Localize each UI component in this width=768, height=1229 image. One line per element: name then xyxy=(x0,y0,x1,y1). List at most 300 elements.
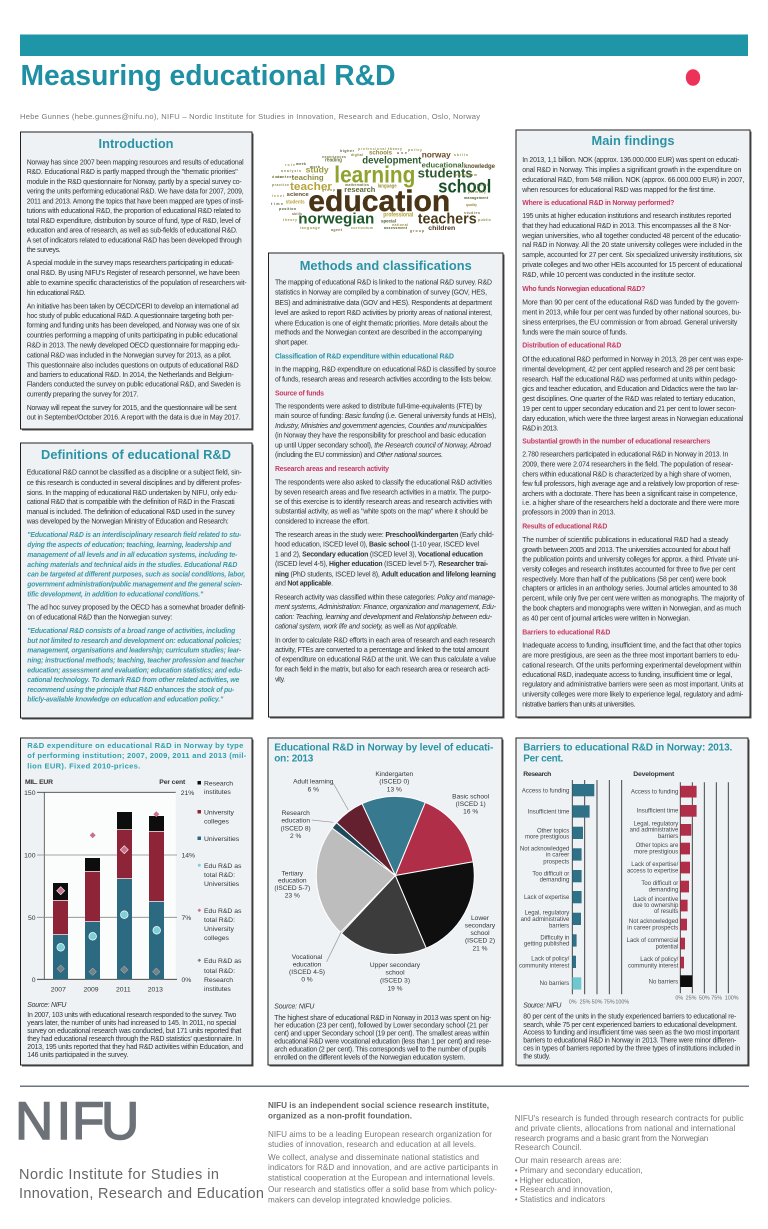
axis labels: 7% xyxy=(182,915,191,922)
word cloud image: teacher xyxy=(290,181,333,193)
text block: chart note xyxy=(27,1012,243,1059)
word cloud image: level xyxy=(272,194,284,198)
text block: introduction: This questionnaire also includes questions on outputs of educational R&D xyxy=(27,362,239,369)
pie labels: school xyxy=(470,930,490,937)
text block: research areas: vity. xyxy=(275,676,285,683)
pie labels: (ISCED 3) xyxy=(380,978,410,985)
text block: chart note: arch education (2 per cent). This corresponds well to the number of pupils xyxy=(274,1047,487,1054)
bar chart: development: Insufficient time xyxy=(637,808,679,814)
pie labels: Vocational xyxy=(292,954,323,961)
text block: research areas: of expenditure on educational R&D at the unit. We can thus calculate a value xyxy=(275,657,496,664)
text block: research areas: se of this exercise is to identify research areas and research activities with xyxy=(275,499,492,506)
bar chart: development: 25% xyxy=(686,995,697,1001)
text block: where performed xyxy=(521,213,743,279)
header band xyxy=(20,34,748,56)
text block: chart note: enrolled on the different levels of the Norwegian education system. xyxy=(274,1054,465,1061)
text block: distribution: gest disciplines. One quarter of the R&D was related to tertiary education, xyxy=(522,396,735,403)
bars: 2009 xyxy=(85,858,100,979)
word cloud image: week xyxy=(295,162,306,166)
text block: distribution: research. Half the educational R&D was performed at units within pedago- xyxy=(522,376,737,383)
text block: results: chapters or articles in an anthology series. Journal articles amounted to 38 xyxy=(522,586,737,593)
text block: growth in researchers xyxy=(522,452,739,517)
text block: source of funds xyxy=(275,403,496,459)
bar chart: development: 75% xyxy=(711,995,722,1001)
text block: who funds: funds were the main source of funds. xyxy=(522,329,627,336)
footer text: about NIFU: We collect, analyse and disseminate national statistics and xyxy=(268,1153,479,1162)
pie labels: (ISCED 0) xyxy=(379,778,409,785)
pie labels: Lower xyxy=(471,915,490,922)
word cloud image: curriculum xyxy=(351,226,373,230)
text block: OECD survey xyxy=(27,604,245,621)
text block: overview: when resources for educational R&D was mapped for the first time. xyxy=(521,187,715,194)
quote: Norwegian definition: aching materials and technical aids in the studies. Educational R&D xyxy=(27,562,237,569)
axis labels: 2013 xyxy=(148,987,163,994)
text block: results: growth between 2005 and 2013. The universities accounted for about half xyxy=(522,547,730,554)
pie labels: Research xyxy=(282,810,310,817)
legend: University xyxy=(204,809,234,816)
quote: Norwegian definition: "Educational R&D is an interdisciplinary research field related to stu- xyxy=(27,532,242,539)
footer text: about NIFU: makers can develop integrated knowledge policies. xyxy=(268,1196,452,1204)
title: Measuring educational R&D xyxy=(20,60,396,92)
text block: source of funds: Industry, Ministries and government agencies, Counties and municipalities xyxy=(275,423,488,430)
legend: institutes xyxy=(204,986,231,993)
text block: introduction: Norway has since 2007 been mapping resources and results of educational xyxy=(27,159,244,166)
text block: distribution: Of the educational R&D performed in Norway in 2013, 28 per cent was expe- xyxy=(522,357,743,364)
legend xyxy=(198,780,242,993)
text block: OECD survey: The ad hoc survey proposed by the OECD has a somewhat broader definiti- xyxy=(27,604,245,611)
word cloud image: management xyxy=(464,196,489,200)
word cloud image: studies xyxy=(464,211,480,215)
source: Source: NIFU xyxy=(523,1003,562,1010)
chart title: on: 2013 xyxy=(274,754,314,765)
footer text: about NIFU xyxy=(268,1101,498,1204)
bar chart: research: getting published xyxy=(524,941,569,947)
legend: colleges xyxy=(204,819,230,826)
quote: Norwegian definition: tific development, in addition to educational conditions." xyxy=(27,592,204,599)
text block: introduction: Norway will repeat the survey for 2015, and the questionnaire will be sent xyxy=(27,405,237,412)
bars: 2011 xyxy=(117,812,132,979)
pie labels: school xyxy=(385,970,405,977)
word cloud image: language xyxy=(300,226,320,230)
bar chart: research: Research xyxy=(523,771,551,778)
slice: kindergarten xyxy=(362,796,425,876)
text block: source of funds: main source of funding: Basic funding (i.e. General university funds at HEIs), xyxy=(275,413,496,420)
text block: results: the publication points and university colleges for approx. a third. Private uni- xyxy=(522,557,739,564)
markers: universities share xyxy=(57,911,160,951)
text block: source of funds: The respondents were asked to distribute full-time-equivalents (FTE) by xyxy=(275,403,483,410)
word cloud image: professional xyxy=(358,147,386,151)
bar chart: development: demanding xyxy=(649,887,678,893)
pie labels xyxy=(274,771,496,992)
source: Source: NIFU xyxy=(27,1002,67,1009)
legend: University xyxy=(204,926,234,933)
text block: introduction: R&D. Educational R&D is partly mapped through the "thematic priorities" xyxy=(27,169,238,176)
pie labels: education xyxy=(281,818,310,825)
bar chart: research: 75% xyxy=(604,999,615,1005)
pie labels: education xyxy=(278,878,307,885)
pie labels: (ISCED 4-5) xyxy=(289,969,325,976)
bar chart: research: Not acknowledged xyxy=(520,847,569,853)
text block: who funds: More than 90 per cent of the educational R&D was funded by the govern- xyxy=(522,300,739,307)
chart title: of performing institution; 2007, 2009, 2011 and 2013 (mil- xyxy=(27,751,247,760)
panel: main findings xyxy=(516,130,752,718)
text block: where performed: sample, accounted for 27 per cent. Six specialized university institutions, six xyxy=(522,252,743,259)
word cloud image: practice xyxy=(272,183,289,187)
word cloud image: mathematics xyxy=(345,183,369,187)
bar chart: development: 50% xyxy=(699,995,710,1001)
word cloud image: policy xyxy=(408,148,422,152)
text block: results: versity colleges and research institutes accounted for three to five per cent xyxy=(522,566,735,573)
axis labels: 2011 xyxy=(116,987,131,994)
footer text: about NIFU: studies of innovation, research and education at all levels. xyxy=(268,1140,476,1149)
word cloud image: students xyxy=(418,167,473,181)
subheading: growth in researchers: Substantial growth in the number of educational researchers xyxy=(522,438,710,445)
word cloud image: experiences xyxy=(322,155,346,159)
text block: definition intro: Educational R&D cannot be classified as a discipline or a subject field, sin- xyxy=(27,470,242,477)
word cloud image: work xyxy=(309,165,320,169)
text block: introduction: onal R&D. By using NIFU's Register of research personnel, we have been xyxy=(27,270,240,277)
text block: chart note: The highest share of educational R&D in Norway in 2013 was spent on hig- xyxy=(274,1015,491,1022)
text block: research areas: cation: Teaching, learning and development and Relationship between edu- xyxy=(275,614,493,621)
bar chart: research: Insufficient time xyxy=(528,809,570,815)
legend: Edu R&D as xyxy=(204,958,242,965)
text block: classification: In the mapping, R&D expenditure on educational R&D is classified by source xyxy=(275,367,496,374)
leader lines xyxy=(312,783,348,962)
text block: barriers: nistrative barriers than units at universities. xyxy=(522,701,635,708)
legend: Research xyxy=(204,780,233,787)
word cloud image: classroom xyxy=(455,173,477,177)
bar chart: development: in career prospects xyxy=(627,925,678,931)
NIFU logo: NIFU xyxy=(15,1092,139,1151)
icon: red dot xyxy=(686,69,700,86)
quote: OECD definition: education; assessment and evaluation; education statistics; and edu- xyxy=(27,667,243,674)
word cloud image: position xyxy=(279,207,296,211)
bar chart: development: Lack of expertise/ xyxy=(631,862,679,868)
text block: barriers: regulatory and administrative barriers were seen as most important. Units at xyxy=(522,682,743,689)
footer text: about NIFU: statistical cooperation at the European and international levels. xyxy=(268,1174,495,1182)
bar chart: development: due to ownership xyxy=(633,903,679,909)
text block: introduction: able to examine specific characteristics of the population of researchers wit- xyxy=(27,280,247,287)
text block: growth in researchers: i.e. a higher share of the researchers held a doctorate and there were more xyxy=(522,500,739,507)
bars: 2007 xyxy=(53,883,68,979)
bar chart: research: Too difficult or xyxy=(532,872,569,878)
text block: methods intro: short paper. xyxy=(275,339,308,346)
pie labels: Basic school xyxy=(452,793,490,800)
text block: distribution xyxy=(522,357,744,432)
word cloud image: national xyxy=(392,223,408,227)
panel box xyxy=(20,738,254,1066)
text block: where performed: R&D, while 10 percent was conducted in the institute sector. xyxy=(522,272,695,279)
text block: chart note: they had educational research through the R&D statistics' questionnaire. In xyxy=(27,1036,241,1043)
subheading: results: Results of educational R&D xyxy=(522,523,607,530)
text block: barriers xyxy=(522,643,743,708)
text block: classification: of funds, research areas and research activities according to the lists below. xyxy=(275,376,492,383)
text block: introduction: 2011 and 2013. Among the topics that have been mapped are types of insti- xyxy=(27,198,244,205)
pie labels: 23 % xyxy=(285,892,300,899)
text block: methods intro: where Education is one of eight thematic priorities. More details about the xyxy=(274,320,488,327)
word cloud image: norway xyxy=(422,149,451,159)
institute name: Innovation, Research and Education xyxy=(19,1186,264,1202)
text block: introduction: currently preparing the survey for 2017. xyxy=(27,391,139,398)
text block: distribution: rimental development, 42 per cent applied research and 28 per cent basic xyxy=(522,367,736,374)
axis labels: MIL. EUR xyxy=(25,779,53,786)
word cloud image: social xyxy=(474,183,488,187)
stacked bar chart xyxy=(24,779,195,994)
text block: overview: In 2013, 1,1 billion. NOK (approx. 136.000.000 EUR) was spent on educati- xyxy=(522,157,739,164)
text block: definition intro: ce this research is conducted in several disciplines and by different profes- xyxy=(27,480,242,487)
text block: barriers: cational research. Of the units performing experimental development within xyxy=(522,662,741,669)
text block: results: percent, while only five per cent were written as monographs. The majority of xyxy=(522,596,744,603)
text block: introduction: countries performing a mapping of units participating in public educational xyxy=(27,333,238,340)
text block: research areas: considered to increase the effort. xyxy=(275,518,369,525)
text block: where performed: private colleges and two other HEIs accounted for 15 percent of educational xyxy=(522,262,743,269)
text block: overview: onal R&D in Norway. This implies a significant growth in the expenditure on xyxy=(522,167,741,174)
text block: chart note: 146 units participated in the survey. xyxy=(27,1052,128,1059)
panel box xyxy=(268,253,504,718)
text block: research areas: for each field in the matrix, but also for each research area or research acti- xyxy=(275,666,490,673)
axis labels: 150 xyxy=(24,790,36,797)
bar chart: development: Lack of incentive xyxy=(634,897,679,903)
text block: growth in researchers: few full professors, high average age and a relatively low proportion of rese- xyxy=(522,481,739,488)
word cloud image: special xyxy=(381,218,396,223)
text block: introduction: Flanders conducted the survey on public educational R&D, and Sweden is xyxy=(27,382,241,389)
axis labels: 100 xyxy=(24,852,36,860)
pie labels: Adult learning xyxy=(293,778,334,785)
word cloud image: reading xyxy=(325,158,342,164)
text block: research areas: The respondents were also asked to classify the educational R&D activities xyxy=(275,479,493,486)
bar chart: development: Legal, regulatory xyxy=(634,822,678,828)
footer text: about NIFU: NIFU is an independent social science research institute, xyxy=(268,1101,489,1110)
bar chart: research: and administrative xyxy=(521,917,570,923)
word cloud image: skills xyxy=(454,153,468,157)
slice: adult learning xyxy=(337,804,395,876)
bar chart: development: more prestigious xyxy=(634,849,678,855)
text block: source of funds: (in Norway they have the responsibility for preschool and basic education xyxy=(275,432,486,439)
quote: OECD definition: management, organisations and leadership; curriculum studies; lear- xyxy=(27,648,242,655)
source: Source: NIFU xyxy=(274,1004,315,1011)
footer text: funding and research areas: • Statistics and indicators xyxy=(515,1195,605,1204)
subheading: classification: Classification of R&D expenditure within educational R&D xyxy=(275,353,454,360)
subheading: source of funds: Source of funds xyxy=(275,390,324,397)
pie labels: (ISCED 1) xyxy=(456,801,486,808)
footer text: about NIFU: organized as a non-profit foundation. xyxy=(268,1112,412,1120)
bar chart: research: 50% xyxy=(592,999,603,1005)
legend: colleges xyxy=(204,935,230,942)
text block: chart note: Access to funding and insufficient time was seen as the two most important xyxy=(523,1029,739,1036)
word cloud image: public xyxy=(478,218,491,222)
bar chart: development: Lack of commercial xyxy=(627,938,678,944)
text block: chart note: years later, the number of units had increased to 145. In 2011, no special xyxy=(27,1020,237,1027)
text block: where performed: 195 units at higher education institutions and research institutes reported xyxy=(522,213,731,220)
bar chart: research: demanding xyxy=(540,878,569,884)
text block: definition intro: was developed by the Norwegian Ministry of Education and Research: xyxy=(26,519,229,526)
word cloud image: professional xyxy=(383,213,414,219)
legend: Universities xyxy=(204,836,240,843)
bar chart: development: community interest xyxy=(628,963,679,969)
text block: results: as 40 per cent of journal articles were written in Norwegian. xyxy=(522,615,690,622)
word cloud image: teachers xyxy=(418,211,477,227)
text block: research areas: substantial activity, as well as "white spots on the map" where it should be xyxy=(275,509,488,516)
text block: research areas: ment systems, Administration: Finance, organization and management, Edu- xyxy=(275,604,497,611)
bar chart: development: of results xyxy=(654,909,678,915)
text block: who funds: ment in 2013, while four per cent was funded by other national sources, bu- xyxy=(522,310,741,317)
axis labels: 0 xyxy=(32,977,36,984)
text block: source of funds: up until Upper secondary school), the Research council of Norway, Abroad xyxy=(275,442,492,449)
word cloud image: data xyxy=(272,175,282,179)
footer text: funding and research areas: research programs and a basic grant from the Norwegian xyxy=(515,1134,708,1143)
slice: lower secondary xyxy=(395,862,474,948)
bar chart: development: Lack of policy/ xyxy=(640,957,679,963)
author line: Hebe Gunnes (hebe.gunnes@nifu.no), NIFU – Nordic Institute for Studies in Innovation, Research and Education, Oslo, Norway xyxy=(20,112,480,121)
subheading: distribution: Distribution of educational R&D xyxy=(522,343,621,350)
panel box xyxy=(516,130,752,718)
panel: definitions xyxy=(20,443,254,720)
text block: chart note: the study. xyxy=(523,1053,550,1060)
chart title: R&D expenditure on educational R&D in Norway by type xyxy=(27,741,243,750)
quote: OECD definition: cational technology. To demark R&D from other related activities, we xyxy=(27,677,239,684)
text block: chart note: search, while 75 per cent experienced barriers to educational development. xyxy=(523,1022,737,1029)
chart title: Per cent. xyxy=(523,754,564,765)
word cloud image: digital xyxy=(351,153,363,157)
quote: Norwegian definition xyxy=(26,532,245,599)
subheading: who funds: Who funds Norwegian educational R&D? xyxy=(522,286,645,293)
quote: Norwegian definition: government administration/public management and the general scien- xyxy=(26,582,243,589)
footer text: funding and research areas xyxy=(515,1114,744,1204)
text block: definition intro: manual is included. The definition of educational R&D used in the survey xyxy=(27,509,235,516)
word cloud image: assessment xyxy=(384,226,408,230)
bar chart: research: Other topics xyxy=(537,828,569,834)
footer text: about NIFU: indicators for R&D and innovation, and are active participants in xyxy=(268,1163,498,1172)
legend: total R&D: xyxy=(204,872,235,879)
word cloud image: time xyxy=(271,202,283,206)
text block: introduction: A special module in the survey maps researchers participating in educati- xyxy=(27,260,234,267)
word cloud image: agent xyxy=(331,228,343,232)
word cloud image xyxy=(271,147,496,233)
panel: methods and classifications xyxy=(268,253,504,718)
text block: results: respectively. More than half of the publications (58 per cent) were book xyxy=(522,576,727,583)
word cloud image: research xyxy=(344,185,376,194)
pie labels: 16 % xyxy=(463,808,478,815)
pie labels: Upper secondary xyxy=(370,962,421,969)
footer text: funding and research areas: NIFU's research is funded through research contracts for public xyxy=(515,1114,744,1123)
text block: barriers: university colleges were more likely to experience legal, regulatory and admi- xyxy=(522,692,743,699)
text block: chart note xyxy=(523,1014,740,1060)
text block: introduction: A set of indicators related to educational R&D has been developed through xyxy=(27,237,242,244)
word cloud image: educational xyxy=(422,162,464,169)
text block: growth in researchers: 2009, there were 2.074 researchers in the field. The population of resear- xyxy=(522,462,733,469)
footer text: funding and research areas: Research Council. xyxy=(515,1143,582,1152)
subheading: barriers: Barriers to educational R&D xyxy=(522,629,610,636)
text block: introduction: education and area of research, as well as sub-fields of educational R&D. xyxy=(27,228,238,235)
text block: growth in researchers: archers with a doctorate. There has been a significant raise in competence, xyxy=(522,491,737,498)
pie labels: (ISCED 5-7) xyxy=(274,885,310,892)
bar chart: development: Too difficult or xyxy=(641,881,678,887)
text block: introduction: tutions with educational R&D, the proportion of educational R&D related to xyxy=(27,208,241,215)
text block: who funds: siness enterprises, the EU commission or from abroad. General university xyxy=(522,319,738,326)
text block: chart note: 80 per cent of the units in the study experienced barriers to educational re- xyxy=(523,1014,736,1021)
text block: introduction: cational R&D was included in the Norwegian survey for 2013, as a pilot. xyxy=(27,353,232,360)
pie labels: secondary xyxy=(465,922,496,929)
footer text: about NIFU: NIFU aims to be a leading European research organization for xyxy=(268,1130,492,1139)
axis labels: Per cent xyxy=(159,779,186,786)
subheading: where performed: Where is educational R&D in Norway performed? xyxy=(522,200,674,207)
text block: where performed: wegian universities, who all together conducted 48 percent of the educatio- xyxy=(521,233,741,240)
text block: research areas: hood education, ISCED level 0), Basic school (1-10 year, ISCED level xyxy=(275,542,479,549)
bar chart: research: 0% xyxy=(569,999,577,1005)
word cloud image: school xyxy=(438,176,491,196)
text block: introduction: vering the units performing educational R&D. We have data for 2007, 2009, xyxy=(27,189,244,196)
pie labels: Tertiary xyxy=(281,870,304,877)
bars: 2013 xyxy=(149,816,164,979)
heading: definitions: Definitions of educational R&D xyxy=(41,447,231,462)
bar chart: development: 100% xyxy=(725,995,739,1001)
text block: classification xyxy=(275,367,496,383)
institute name: Nordic Institute for Studies in xyxy=(19,1167,219,1183)
axis labels: 50 xyxy=(28,915,36,922)
text block: research areas: activity, FTEs are converted to a percentage and linked to the total amount xyxy=(275,647,489,654)
word cloud image: group xyxy=(410,229,424,233)
bar chart: development: Other topics are xyxy=(636,843,679,849)
bar chart: research: more prestigious xyxy=(525,834,569,840)
bar chart: development: Access to funding xyxy=(631,789,678,795)
text block: introduction: hin educational R&D. xyxy=(27,290,86,297)
text block: introduction: module in the R&D questionnaire for Norway, partly by a special survey co- xyxy=(27,179,242,186)
pie labels: 21 % xyxy=(472,945,488,952)
axis labels: 14% xyxy=(182,852,195,860)
bar chart: development xyxy=(627,771,739,1001)
bar chart: research: Lack of expertise xyxy=(524,895,570,901)
text block: methods intro: level are asked to report R&D activities by priority areas of national interest, xyxy=(275,310,492,317)
quote: OECD definition: blicly-available knowledge on education and education policy." xyxy=(27,697,224,704)
panel box xyxy=(20,132,254,430)
slice: basic school xyxy=(395,802,473,876)
text block: growth in researchers: 2.780 researchers participated in educational R&D in Norway in 2013. In xyxy=(522,452,728,459)
bar chart: research: No barriers xyxy=(540,981,569,987)
bar chart: development: access to expertise xyxy=(627,868,679,874)
pie labels: Kindergarten xyxy=(375,771,414,778)
bar chart: development: potential xyxy=(656,944,678,950)
axis labels xyxy=(24,779,195,994)
legend: Research xyxy=(204,977,233,984)
bar chart: development: Not acknowledged xyxy=(629,919,678,925)
word cloud image: group xyxy=(322,188,335,192)
legend: total R&D: xyxy=(204,968,235,975)
text block: who funds xyxy=(522,300,741,336)
word cloud image: quality xyxy=(466,203,477,207)
text block: research areas: In order to calculate R&D efforts in each area of research and each research xyxy=(275,637,495,644)
quote: OECD definition: but not limited to research and development on: educational policies; xyxy=(27,638,241,645)
word cloud image: teaching xyxy=(292,175,324,182)
word cloud image: science xyxy=(287,192,309,198)
text block: research areas xyxy=(275,479,497,683)
axis labels: 2007 xyxy=(51,987,66,994)
text block: methods intro: The mapping of educational R&D is linked to the national R&D survey. R&D xyxy=(275,280,492,287)
slice: upper secondary xyxy=(341,876,426,955)
panel: introduction xyxy=(20,132,254,430)
panel: barriers bar charts xyxy=(516,738,750,1066)
word cloud image: development xyxy=(362,155,422,166)
word cloud image: use xyxy=(397,151,407,155)
text block: distribution: gics and teacher education, and Education and Didactics were the two lar- xyxy=(522,386,738,393)
word cloud image: theory xyxy=(283,218,297,222)
text block: chart note xyxy=(274,1015,491,1061)
text block: where performed: nal R&D in Norway. All the 20 state university colleges were included in the xyxy=(522,242,742,249)
word cloud image: knowledge xyxy=(464,164,496,170)
axis labels: 0% xyxy=(182,977,191,984)
legend: institutes xyxy=(204,789,231,796)
text block: definition intro: sions. In the mapping of educational R&D undertaken by NIFU, only edu- xyxy=(27,490,238,497)
text block: introduction: and barriers to educational R&D. In 2014, the Netherlands and Belgium- xyxy=(27,372,234,379)
